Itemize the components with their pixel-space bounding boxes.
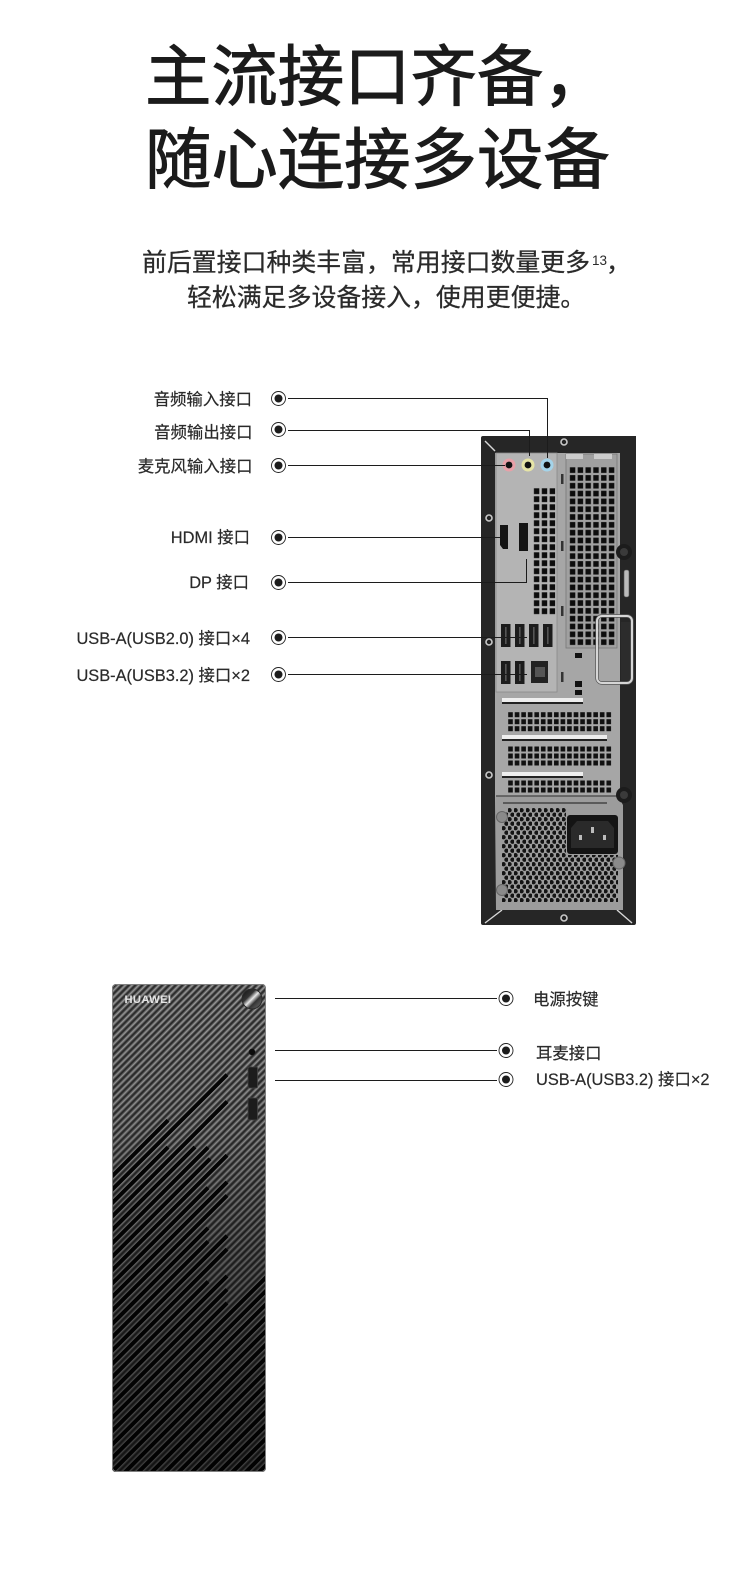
subtitle text: 13 xyxy=(592,253,607,268)
handle xyxy=(597,616,633,683)
callout: dp: DP 接口 xyxy=(189,574,249,592)
callout: audio input xyxy=(154,391,548,458)
callout: audio input: 音频输入接口 xyxy=(154,391,252,409)
callout: usb 3.2 front xyxy=(275,1071,710,1089)
power button xyxy=(242,989,262,1009)
title: 主流接口齐备 xyxy=(145,41,543,115)
corner accents xyxy=(485,441,632,923)
darkening toward the base xyxy=(112,984,266,1472)
side latch xyxy=(624,570,629,597)
callout: usb 2.0 xyxy=(76,630,527,648)
callout: mic input: 麦克风输入接口 xyxy=(138,458,252,476)
title: ， xyxy=(543,41,609,115)
callout: usb 3.2 rear: USB-A(USB3.2) 接口×2 xyxy=(76,667,250,685)
clips xyxy=(561,474,564,682)
panel: rear view of the desktop xyxy=(481,436,636,925)
panel: front view of the desktop xyxy=(100,984,266,1472)
audio ports xyxy=(502,458,554,472)
callout: audio output: 音频输出接口 xyxy=(154,424,252,442)
io panel xyxy=(496,453,557,692)
power supply plate xyxy=(496,796,623,910)
subtitle text xyxy=(142,249,631,312)
title xyxy=(145,41,610,198)
pci slots xyxy=(502,698,607,778)
callout: hdmi xyxy=(171,529,500,547)
small holes xyxy=(575,653,582,695)
subtitle text: 轻松满足多设备接入，使用更便捷。 xyxy=(187,284,585,312)
black stripes lower section xyxy=(112,1270,266,1472)
knob upper xyxy=(616,544,632,560)
screws xyxy=(496,812,625,896)
callout: hdmi: HDMI 接口 xyxy=(171,529,250,547)
dp port xyxy=(519,523,528,551)
usb 2.0 ports xyxy=(501,624,552,647)
hdmi port xyxy=(500,525,508,549)
callout: audio output xyxy=(154,422,530,456)
striped front face xyxy=(112,984,266,1472)
case shell xyxy=(481,436,636,925)
headset jack xyxy=(249,1049,255,1055)
callout: headset port: 耳麦接口 xyxy=(536,1045,602,1063)
io vents xyxy=(533,488,557,616)
callout: power key: 电源按键 xyxy=(533,991,599,1009)
knob lower xyxy=(616,787,632,803)
power socket xyxy=(567,815,618,854)
bright edges xyxy=(112,984,266,1472)
case rings xyxy=(486,439,567,921)
logo: HUAWEI xyxy=(124,994,171,1006)
expansion vents xyxy=(566,454,617,648)
subtitle text: ， xyxy=(606,249,631,277)
callout: usb 2.0: USB-A(USB2.0) 接口×4 xyxy=(76,630,250,648)
usb 3.2 ports and ethernet xyxy=(501,661,548,684)
callout: dp xyxy=(189,559,526,592)
pci vents xyxy=(508,712,612,794)
usb ports front xyxy=(248,1067,258,1120)
title: 随心连接多设备 xyxy=(145,124,610,198)
black stripe cluster xyxy=(113,1073,228,1420)
callout: mic input xyxy=(138,458,505,476)
dark side strip xyxy=(620,436,636,626)
silver back plate xyxy=(495,453,622,910)
callout: usb 3.2 rear xyxy=(76,667,527,685)
callout: headset port xyxy=(275,1044,602,1063)
subtitle text: 前后置接口种类丰富，常用接口数量更多 xyxy=(142,249,590,277)
callout: usb 3.2 front: USB-A(USB3.2) 接口×2 xyxy=(536,1071,710,1089)
callout: power key xyxy=(275,991,599,1009)
